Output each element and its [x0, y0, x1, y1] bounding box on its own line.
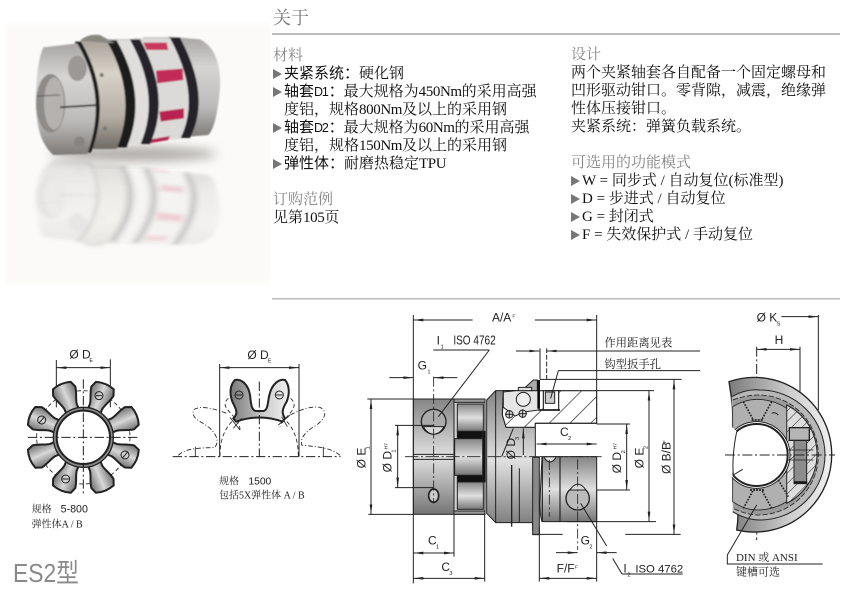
text block: material: 夹紧系统：硬化钢: [284, 65, 404, 82]
dimension labels: 2: [589, 545, 592, 551]
dimension labels: 作用距离见表: [604, 335, 672, 351]
dimension labels: 2: [568, 436, 571, 442]
dimension labels: [354, 310, 683, 578]
dimension labels: I: [437, 334, 440, 348]
text block: material: 材料: [273, 48, 303, 64]
text block: optional function modes: G = 封闭式: [582, 209, 654, 225]
text block: optional function modes: D = 步进式 / 自动复位: [582, 191, 725, 207]
text block: material: 度铝，规格800Nm及以上的采用钢: [284, 102, 507, 118]
drawing: coupling end section view: DIN 或 ANSI: [736, 551, 798, 564]
drawing: coupling side section with dimensions: [354, 310, 700, 583]
drawing: elastomer spider size 5-800: Ø D: [69, 347, 91, 361]
dimension labels: H7: [383, 443, 389, 449]
text block: order example: 订购范例: [273, 192, 333, 208]
text block: order example: 见第105页: [273, 210, 339, 226]
dimension labels: 钩型扳手孔: [604, 356, 661, 372]
dimension labels: 2: [627, 572, 630, 578]
text block: material: [273, 47, 537, 172]
dimension labels: Ø E: [354, 448, 368, 468]
dimension lines: [367, 315, 700, 583]
drawing: elastomer segment size 1500: 1500: [248, 476, 272, 487]
dimension labels: C: [560, 425, 569, 439]
drawing: coupling end section view: H: [775, 333, 783, 347]
dimension labels: F: [662, 440, 668, 443]
dimension labels: F: [575, 564, 578, 570]
text block: optional function modes: [571, 154, 784, 243]
heading: about: 关于: [273, 8, 309, 28]
left clamping hub: [413, 399, 454, 514]
text block: design: 性体压接钳口。: [571, 101, 676, 117]
text block: design: 设计: [571, 47, 601, 63]
divider lines: [272, 33, 840, 300]
dimension labels: 3: [449, 571, 452, 577]
drawing: elastomer segment size 1500: E: [268, 359, 272, 365]
dimension labels: Ø D: [610, 452, 624, 473]
dimension labels: 1: [365, 446, 371, 449]
dimension labels: 1: [436, 544, 439, 550]
elastomer and jaw: [454, 399, 485, 514]
dimension labels: Ø D: [381, 451, 395, 472]
text block: material: 度铝，规格150Nm及以上的采用钢: [284, 138, 507, 154]
drawing: coupling end section view: [718, 311, 835, 580]
dimension labels: H7: [613, 443, 619, 449]
dimension labels: 2: [644, 446, 650, 449]
dimension labels: ISO 4762: [635, 563, 683, 575]
drawing: coupling end section view: 键槽可选: [736, 564, 780, 580]
text block: material: 轴套D1：最大规格为450Nm的采用高强: [284, 83, 537, 100]
drawing: elastomer spider size 5-800: E: [89, 358, 93, 364]
drawing: elastomer spider size 5-800: [25, 347, 141, 530]
drawing: elastomer segment size 1500: [173, 348, 341, 502]
drawing: elastomer spider size 5-800: 弹性体A / B: [32, 517, 83, 530]
text block: design: 夹紧系统：弹簧负载系统。: [571, 119, 751, 135]
drawing: coupling end section view: S: [777, 321, 781, 327]
product photo: coupling with reflection: [6, 23, 270, 283]
heading: ES2 type: ES2型: [13, 558, 79, 588]
text block: optional function modes: F = 失效保护式 / 手动复位: [582, 227, 753, 243]
dimension labels: 3: [515, 437, 521, 440]
dimension labels: 1: [441, 345, 444, 351]
text block: material: 轴套D2：最大规格为60Nm的采用高强: [284, 119, 530, 136]
dimension labels: C: [441, 560, 450, 574]
dimension labels: G: [418, 358, 427, 372]
drawing: elastomer spider size 5-800: 5-800: [61, 504, 88, 516]
right hub section, hatched: [502, 380, 597, 522]
dimension labels: 1: [392, 450, 398, 453]
central housing: [487, 391, 539, 535]
dimension labels: Ø E: [633, 448, 647, 468]
dimension labels: Ø B/B: [660, 442, 674, 474]
drawing: elastomer segment size 1500: Ø D: [247, 348, 269, 362]
drawing: coupling end section view: Ø K: [757, 311, 777, 325]
dimension labels: 2: [621, 450, 627, 453]
dimension labels: 1: [427, 369, 430, 375]
text block: design: [571, 46, 826, 135]
text block: material: 弹性体：耐磨热稳定TPU: [284, 155, 446, 172]
text block: design: 两个夹紧轴套各自配备一个固定螺母和: [571, 65, 826, 81]
dimension labels: F: [512, 313, 515, 319]
centre lines: [405, 377, 602, 550]
dimension labels: F/F: [557, 561, 575, 575]
dimension labels: Ø D: [504, 438, 518, 459]
text block: optional function modes: W = 同步式 / 自动复位(标准型): [582, 173, 784, 189]
drawing: elastomer spider size 5-800: 规格: [32, 502, 52, 516]
dimension labels: C: [428, 533, 437, 547]
drawing: elastomer segment size 1500: 包括5X弹性体 A / B: [219, 489, 305, 502]
text block: optional function modes: 可选用的功能模式: [571, 155, 691, 171]
text block: design: 凹形驱动钳口。零背隙，减震，绝缘弹: [571, 83, 826, 99]
drawing: elastomer segment size 1500: 规格: [219, 473, 239, 487]
dimension labels: ISO 4762: [453, 334, 496, 348]
text block: order example: [273, 191, 339, 226]
dimension labels: G: [581, 533, 590, 547]
dimension labels: I: [623, 561, 627, 575]
dimension labels: A/A: [492, 310, 511, 324]
